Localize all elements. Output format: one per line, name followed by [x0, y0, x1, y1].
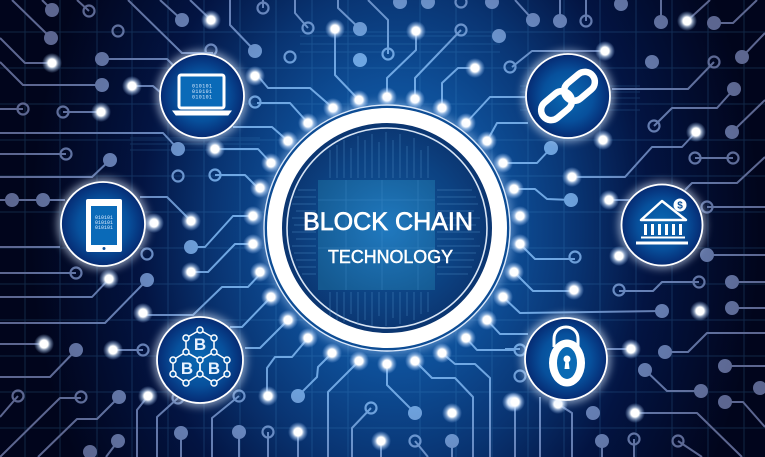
- icon: bank: $: [677, 200, 683, 212]
- title: BLOCK CHAIN: BLOCK CHAIN: [303, 208, 473, 236]
- subtitle: TECHNOLOGY: TECHNOLOGY: [328, 247, 453, 267]
- icon: tablet: 010101: [95, 215, 113, 221]
- microchip pattern: [292, 132, 480, 326]
- icon: bitcoin network: B: [208, 359, 220, 378]
- icon: laptop: [156, 50, 248, 142]
- icon: bitcoin network: B: [194, 335, 206, 354]
- hub white ring: [274, 116, 500, 340]
- hub inner thin ring: [287, 128, 487, 328]
- microchip square: [318, 180, 435, 290]
- icon: laptop: 010101: [192, 84, 212, 90]
- icon: laptop: 010101: [192, 89, 212, 95]
- icon: tablet: [57, 178, 149, 270]
- hub outer thin ring: [264, 105, 510, 351]
- icon: padlock: [521, 314, 611, 404]
- icon: chain link: [522, 50, 614, 142]
- icon: laptop: 010101: [192, 94, 212, 100]
- icon: bitcoin network: B: [181, 359, 193, 378]
- central hub: [260, 101, 514, 355]
- icon: bank: [618, 181, 706, 269]
- icon: tablet: 010101: [95, 220, 113, 226]
- icon: tablet: 010101: [95, 225, 113, 231]
- icon: bitcoin network: [153, 313, 247, 407]
